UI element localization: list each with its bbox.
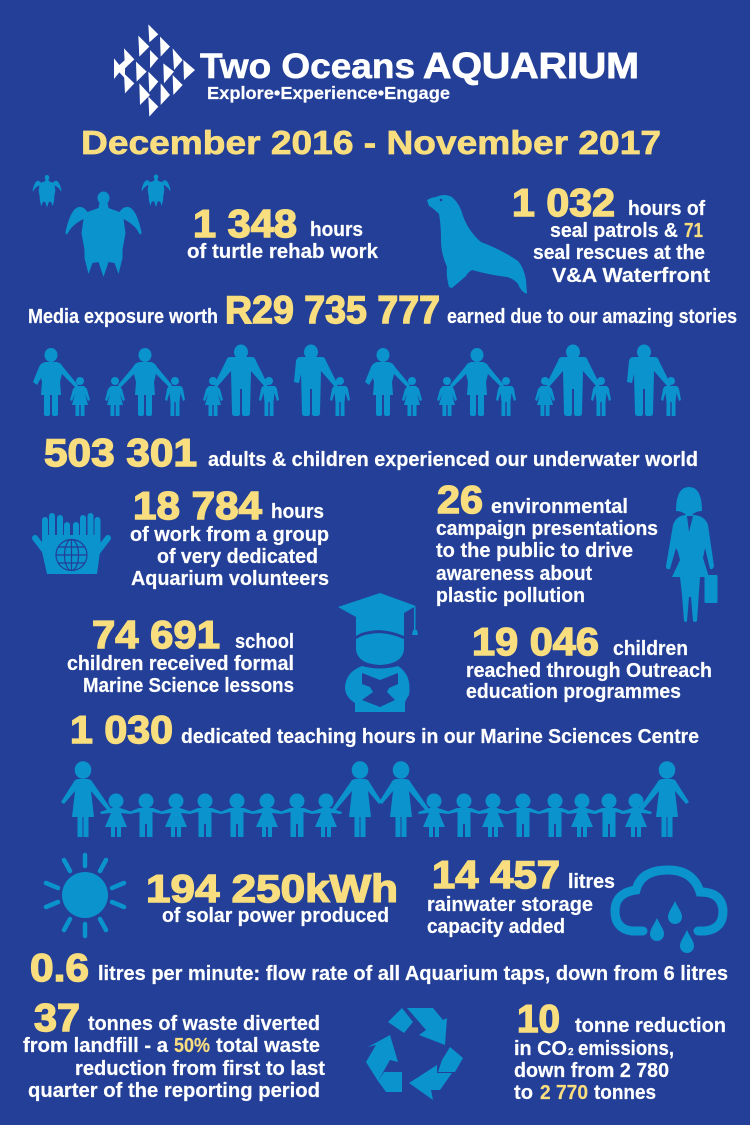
stat: waste diverted: tonnes of waste diverted (88, 1013, 320, 1035)
stat: volunteers (130, 485, 329, 590)
stat: rainwater: 14 457 (432, 854, 560, 897)
stat: rainwater (427, 854, 615, 938)
stat: media exposure (28, 289, 737, 332)
stat: outreach: reached through Outreach (466, 660, 712, 682)
stat: tap flow rate: litres per minute: flow rate of all Aquarium taps, down from 6 litres (98, 963, 728, 985)
stat: campaign presentations: campaign presentations (436, 518, 658, 540)
logo: Two Oceans Aquarium (114, 24, 639, 117)
icon: graduate reading (338, 593, 418, 712)
logo: Two Oceans Aquarium: AQUARIUM (423, 45, 639, 86)
stat: school lessons: Marine Science lessons (83, 675, 294, 697)
stat: waste diverted: 37 (34, 997, 80, 1040)
stat: campaign presentations (436, 479, 658, 607)
stat: CO2 reduction: tonnes (594, 1082, 656, 1104)
stat: CO2 reduction: emissions, (578, 1038, 674, 1060)
stat: waste diverted: quarter of the reporting period (28, 1080, 320, 1102)
stat: seal patrols: V&A Waterfront (552, 265, 710, 287)
stat: CO2 reduction: tonne reduction (575, 1015, 726, 1037)
stat: teaching hours (70, 709, 699, 752)
icon: turtles (33, 174, 170, 277)
stat: volunteers: Aquarium volunteers (131, 568, 329, 590)
stat: volunteers: of work from a group (130, 524, 329, 546)
stat: school lessons: children received formal (67, 653, 294, 675)
stat: rainwater: capacity added (427, 916, 565, 938)
stat: media exposure: R29 735 777 (225, 289, 440, 332)
stat: seal patrols: 71 (684, 220, 703, 242)
stat: media exposure: Media exposure worth (28, 306, 218, 328)
stat: CO2 reduction (514, 998, 726, 1104)
stat: outreach: education programmes (466, 681, 681, 703)
stat: visitors (44, 432, 698, 475)
title: December 2016 - November 2017 (81, 124, 661, 161)
stat: tap flow rate: 0.6 (30, 947, 89, 990)
stat: rainwater: rainwater storage (427, 894, 593, 916)
stat: waste diverted: from landfill - a (23, 1035, 169, 1057)
stat: volunteers: of very dedicated (157, 546, 318, 568)
stat: school lessons (67, 614, 294, 697)
stat: school lessons: 74 691 (92, 614, 220, 657)
stat: solar power: 194 250kWh (146, 868, 398, 911)
stat: waste diverted: 50% (174, 1035, 210, 1057)
icon: hands holding globe (35, 516, 108, 574)
stat: CO2 reduction: 10 (517, 998, 560, 1041)
stat: campaign presentations: plastic pollution (436, 585, 585, 607)
stat: CO2 reduction: to (514, 1082, 533, 1104)
stat: visitors: 503 301 (44, 432, 197, 475)
stat: school lessons: school (235, 631, 294, 653)
stat: outreach: 19 046 (472, 621, 599, 664)
stat: solar power (146, 868, 398, 927)
stat: turtle rehab: of turtle rehab work (187, 241, 379, 263)
stat: CO2 reduction: 2 770 (540, 1082, 588, 1104)
stat: seal patrols: seal patrols & (550, 220, 678, 242)
stat: seal patrols (512, 182, 710, 287)
icon row: chain of teachers and children (61, 761, 689, 837)
stat: campaign presentations: to the public to drive (436, 540, 633, 562)
stat: campaign presentations: awareness about (436, 563, 592, 585)
stat: outreach (466, 621, 712, 703)
stat: turtle rehab (187, 203, 379, 263)
stat: teaching hours: dedicated teaching hours in our Marine Sciences Centre (181, 726, 699, 748)
stat: waste diverted (23, 997, 325, 1102)
stat: turtle rehab: 1 348 (193, 203, 297, 246)
stat: waste diverted: total waste (216, 1035, 320, 1057)
tagline: Explore•Experience•Engage (207, 83, 450, 103)
stat: teaching hours: 1 030 (70, 709, 173, 752)
stat: CO2 reduction: down from 2 780 (514, 1060, 669, 1082)
icon: recycling arrows (366, 1008, 463, 1100)
stat: tap flow rate (30, 947, 728, 990)
stat: CO2 reduction: in CO (514, 1038, 567, 1060)
stat: solar power: of solar power produced (162, 905, 389, 927)
wordmark: Two Oceans (200, 47, 415, 86)
stat: campaign presentations: environmental (491, 496, 628, 518)
stat: volunteers: 18 784 (133, 485, 262, 528)
stat: rainwater: litres (568, 871, 615, 893)
icon: seal (427, 195, 527, 294)
stat: CO2 reduction: 2 (568, 1047, 574, 1058)
stat: volunteers: hours (271, 501, 324, 523)
stat: turtle rehab: hours (310, 219, 363, 241)
stat: seal patrols: 1 032 (512, 182, 615, 225)
stat: waste diverted: reduction from first to last (75, 1058, 325, 1080)
stat: seal patrols: seal rescues at the (533, 242, 705, 264)
stat: campaign presentations: 26 (437, 479, 483, 522)
icon: woman presenter (666, 487, 718, 622)
icon: sun (46, 855, 124, 936)
stat: outreach: children (613, 638, 688, 660)
icon: rain cloud (615, 870, 723, 953)
stat: visitors: adults & children experienced our underwater world (208, 449, 698, 471)
icon: fish diamond (114, 24, 195, 117)
icon row: families (33, 344, 681, 416)
stat: seal patrols: hours of (628, 198, 705, 220)
